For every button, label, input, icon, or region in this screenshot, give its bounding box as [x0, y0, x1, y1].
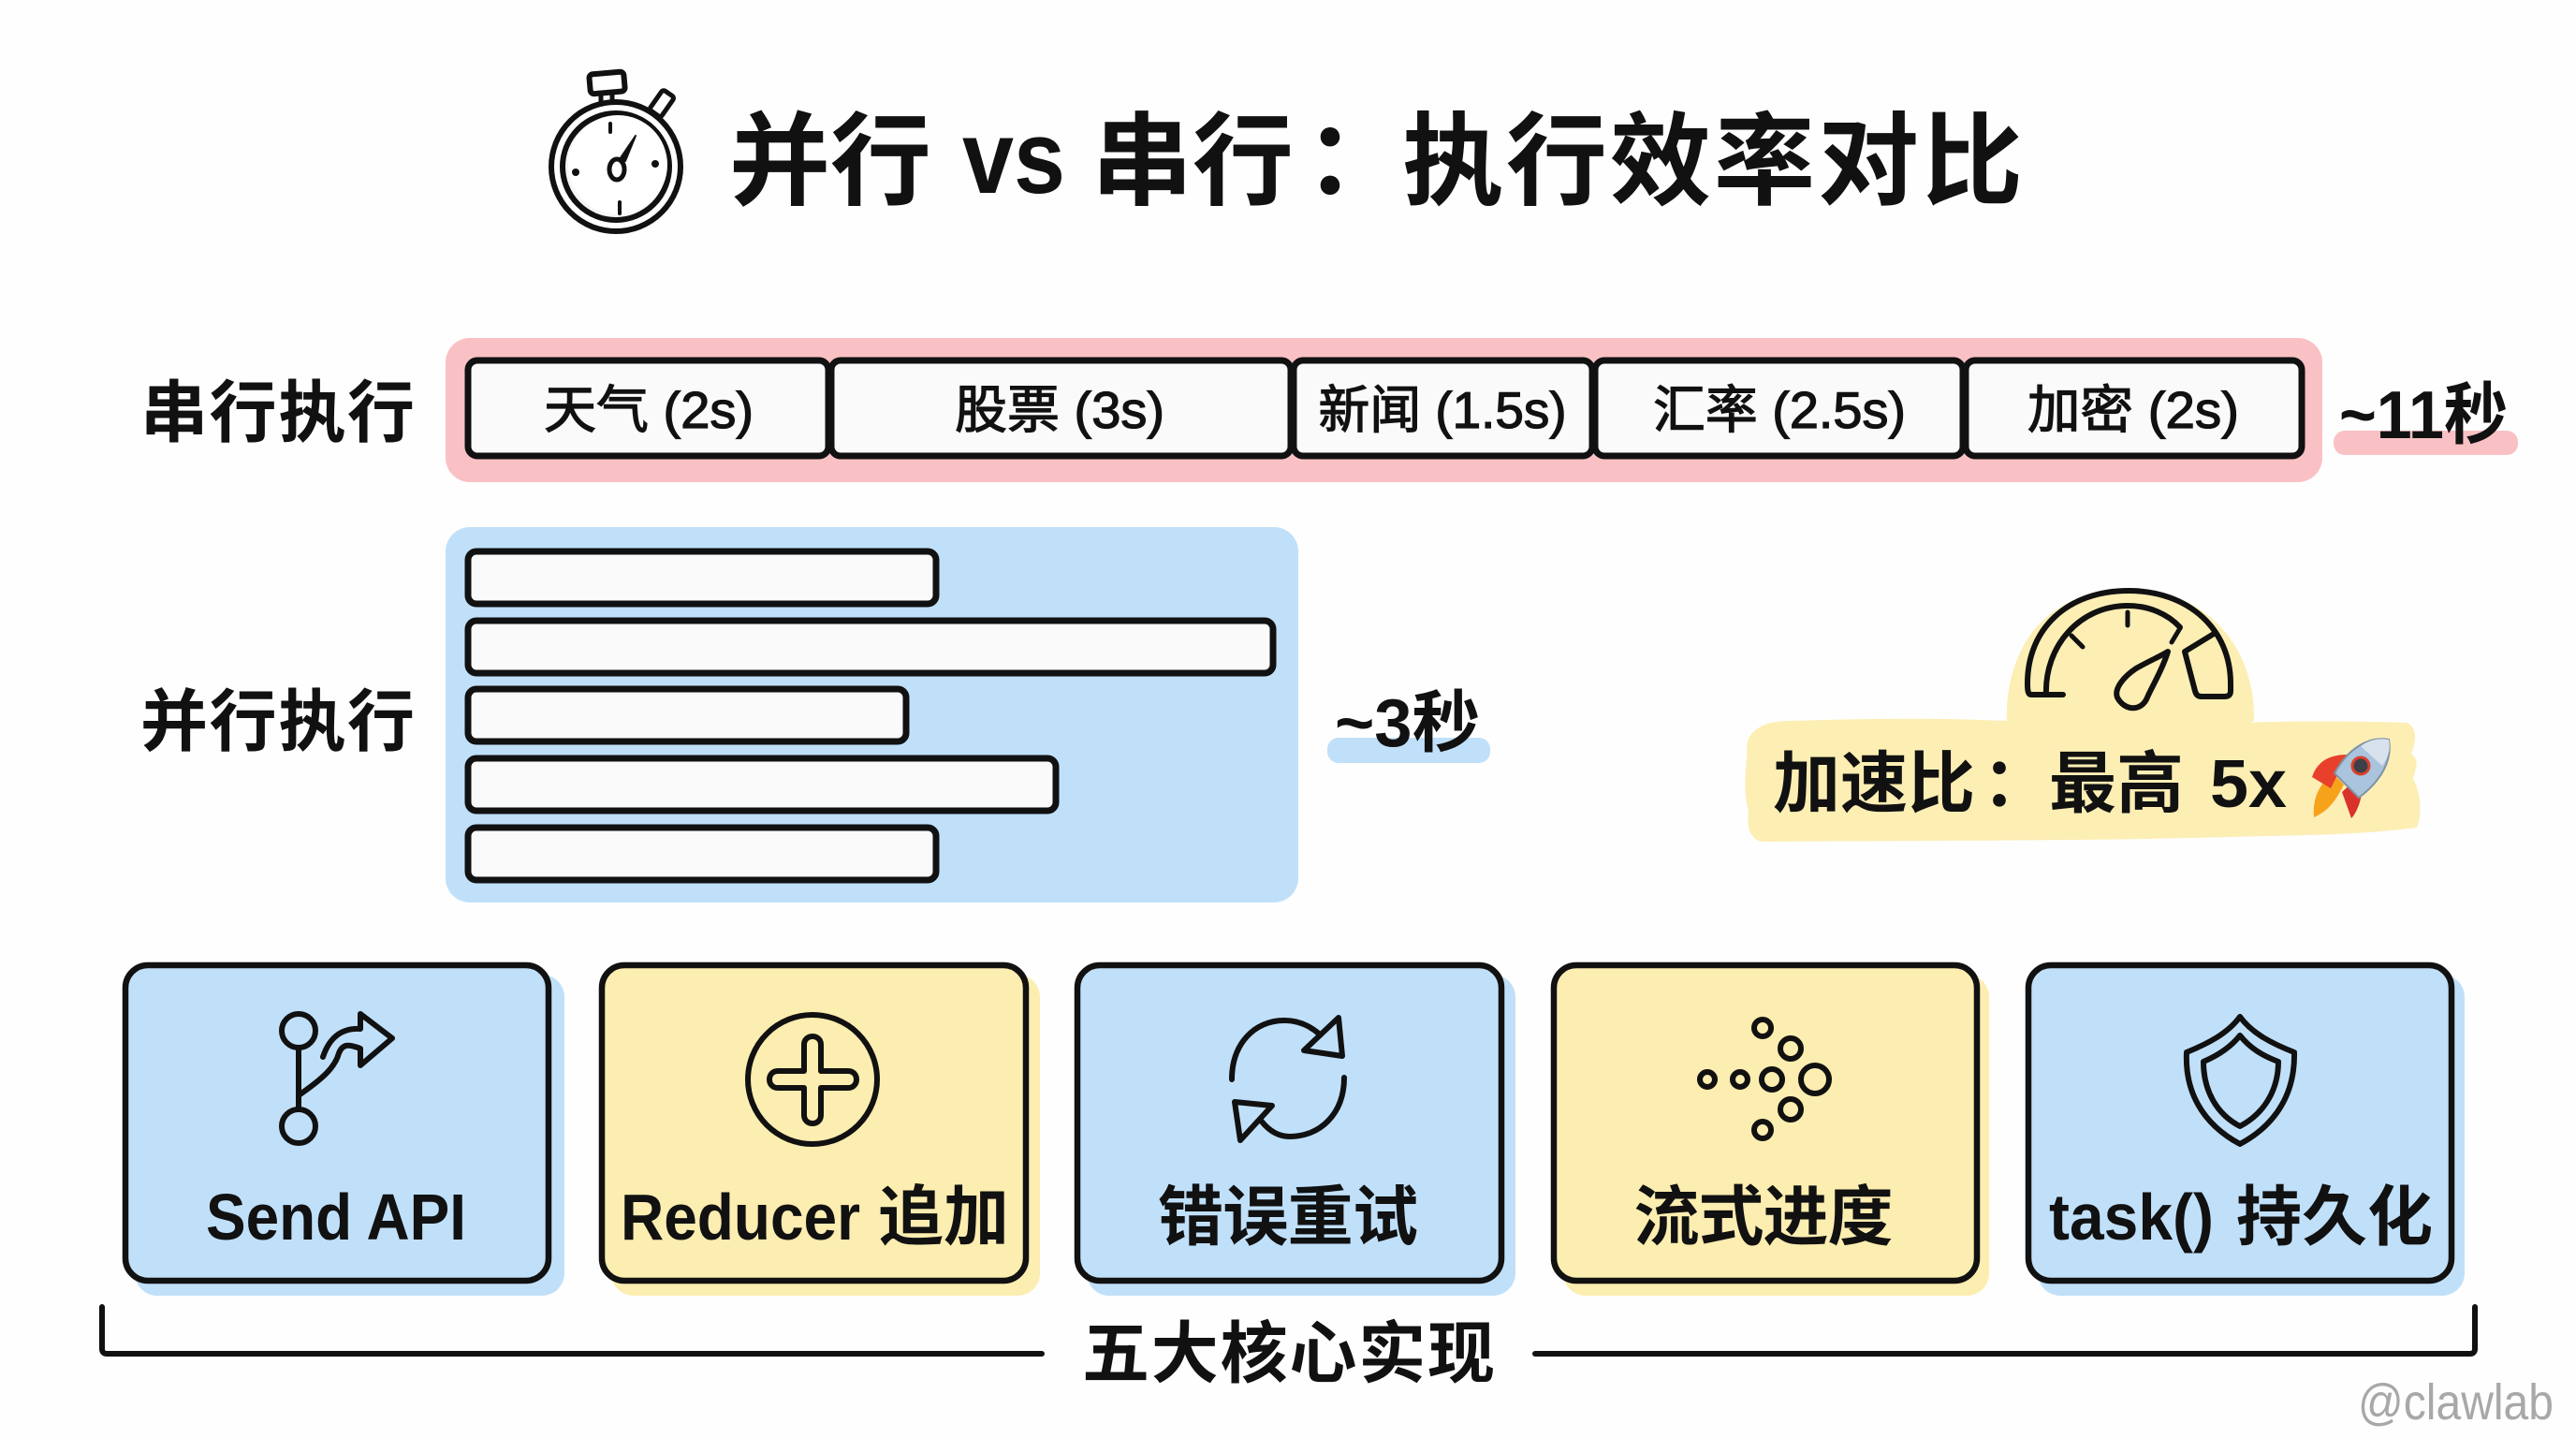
title: 执行效率对比 — [1402, 105, 2026, 218]
bar: stocks — [468, 621, 1273, 673]
badge background — [1745, 589, 2420, 842]
bracket: five core implementations — [102, 1307, 2475, 1392]
task: crypto 2s — [1966, 360, 2302, 456]
card label: task() — [2049, 1181, 2214, 1254]
title — [729, 100, 2026, 218]
panel: parallel execution timeline — [446, 527, 1298, 902]
bar: exchange rate — [468, 758, 1056, 811]
speedup text: 5x — [2210, 747, 2287, 822]
icon: rocket — [2312, 739, 2390, 818]
watermark: @clawlab — [2358, 1374, 2554, 1431]
task: stocks 3s — [831, 360, 1291, 456]
callout: speedup badge — [1745, 589, 2420, 842]
task: crypto 2s: 加密 (2s) — [2027, 381, 2239, 439]
card label — [621, 1181, 1009, 1254]
speedup text: 加速比 — [1773, 747, 1975, 822]
title: ： — [1305, 102, 1406, 215]
task: stocks 3s: 股票 (3s) — [955, 381, 1164, 439]
task: weather 2s — [468, 360, 828, 456]
card: streaming progress — [1554, 965, 1989, 1296]
task: news 1.5s — [1294, 360, 1592, 456]
card label: 错误重试 — [1158, 1181, 1418, 1254]
speedup text: ： — [1983, 746, 2050, 821]
icon: stopwatch — [551, 71, 681, 231]
task: weather 2s: 天气 (2s) — [544, 381, 754, 439]
label: parallel execution: 并行执行 — [140, 685, 415, 760]
bracket label: 五大核心实现 — [1082, 1317, 1495, 1392]
card label: 流式进度 — [1634, 1181, 1893, 1254]
card label: Send API — [206, 1181, 466, 1254]
card: error retry — [1077, 965, 1515, 1296]
icon: retry arrows — [1232, 1018, 1344, 1140]
icon: plus in circle — [748, 1015, 877, 1144]
card: Reducer append — [602, 965, 1040, 1296]
title: 串行 — [1091, 105, 1294, 218]
card: Send API — [125, 965, 564, 1296]
icon: converging dots — [1700, 1020, 1829, 1138]
speedup text — [1773, 746, 2287, 822]
callout: parallel total: ~3秒 — [1335, 686, 1480, 761]
card: task persistence — [2028, 965, 2465, 1296]
title: 并行 — [729, 105, 931, 218]
icon: speedometer — [2027, 591, 2231, 708]
label: serial execution: 串行执行 — [140, 376, 415, 451]
title: vs — [962, 100, 1065, 215]
task: news 1.5s: 新闻 (1.5s) — [1318, 381, 1567, 439]
task: exchange rate 2.5s — [1595, 360, 1963, 456]
task: exchange rate 2.5s: 汇率 (2.5s) — [1653, 381, 1906, 439]
bar: crypto — [468, 828, 936, 880]
card label: 持久化 — [2236, 1181, 2433, 1254]
bar: news — [468, 689, 906, 741]
callout: serial total: ~11秒 — [2339, 378, 2508, 453]
panel: serial execution timeline — [446, 338, 2322, 482]
card label: Reducer — [621, 1181, 860, 1254]
card label — [2049, 1181, 2433, 1254]
icon: branch arrow — [282, 1014, 392, 1143]
icon: shield — [2187, 1017, 2294, 1144]
bar: weather — [468, 551, 936, 604]
speedup text: 最高 — [2049, 747, 2184, 822]
card label: 追加 — [878, 1181, 1009, 1254]
